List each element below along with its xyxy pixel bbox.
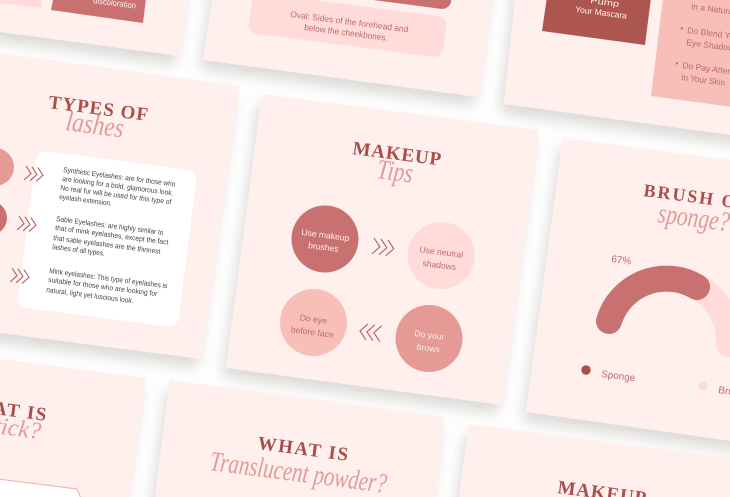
panel: top-left slide remnant [0,0,147,23]
heading: types of: TYPES OF [47,92,149,126]
percent label: 67% [611,254,632,268]
lash descriptions: are looking for a bold, glamorous look. [62,174,174,197]
tip: do eye before face: before face [290,324,335,340]
script heading: tips: Tips [375,154,415,190]
panel: brush or sponge [581,180,730,399]
panel: what is stick [0,393,84,497]
lash descriptions: Sable Eyelashes: are highly similar to [56,214,164,237]
lash descriptions: that of mink eyelashes, except the fact [55,223,169,247]
lash descriptions: No real fur will be used for this type of [60,183,172,206]
arrow: chevrons two [17,216,37,232]
heading: makeup: MAKEUP [351,138,443,170]
tip: do eye before face [280,289,347,356]
tip: do your brows: Do your [414,328,445,342]
arrow: chevrons one [24,166,44,182]
tip: use neutral shadows: shadows [422,258,457,272]
lash descriptions: lashes of all types. [52,242,105,258]
lash descriptions: natural, light yet luscious look. [46,285,134,305]
script heading: lashes: lashes [64,106,126,144]
icon: circle two [0,201,7,235]
lash descriptions [46,165,176,305]
panel: types of lashes [0,92,198,328]
arrow: chevrons right [372,238,395,257]
lash descriptions: Synthetic Eyelashes: are for those who [63,165,176,189]
lash descriptions: Mink eyelashes: This type of eyelashes is [49,266,168,290]
panel: do and don't slide remnant: to Your Skin [681,72,726,88]
tip: do your brows: brows [416,342,440,354]
tip: do eye before face: Do eye [299,312,328,326]
tip: use makeup brushes: Use makeup [301,227,350,243]
white text panel [17,150,198,328]
arrow: chevrons left [359,323,382,342]
arrow: chevrons three [10,268,30,284]
tip: use neutral shadows: Use neutral [419,244,464,260]
tip: do your brows [396,305,462,372]
legend: sponge [581,365,636,384]
chart: half donut [609,279,729,344]
panel: do and don't slide remnant: • [680,23,684,33]
panel: do and don't slide remnant: • [675,58,679,68]
icon: circle one [0,148,14,186]
panel: translucent powder [208,433,389,497]
legend: brush [698,381,730,399]
legend: sponge: Sponge [601,369,636,384]
panel: makeup tips [280,138,474,372]
panel: face shape slide remnant: below the cheekbones. [304,22,388,43]
white tab outline [0,478,84,497]
panel: do and don't slide remnant [542,0,730,108]
lash descriptions: eyelash extension. [59,192,112,208]
lash descriptions: that sable eyelashes are the thinnest [53,233,161,256]
tip: use makeup brushes [292,206,358,272]
panel: face shape slide remnant [248,0,455,58]
tip: use makeup brushes: brushes [308,240,339,254]
lash descriptions: suitable for those who are looking for [48,275,159,298]
panel: face shape slide remnant: Oval: Sides of the forehead and [290,9,409,34]
heading: what is: WHAT IS [256,433,349,466]
tip: use neutral shadows [408,222,474,289]
panel: do and don't slide remnant: Your Mascara [575,4,628,21]
